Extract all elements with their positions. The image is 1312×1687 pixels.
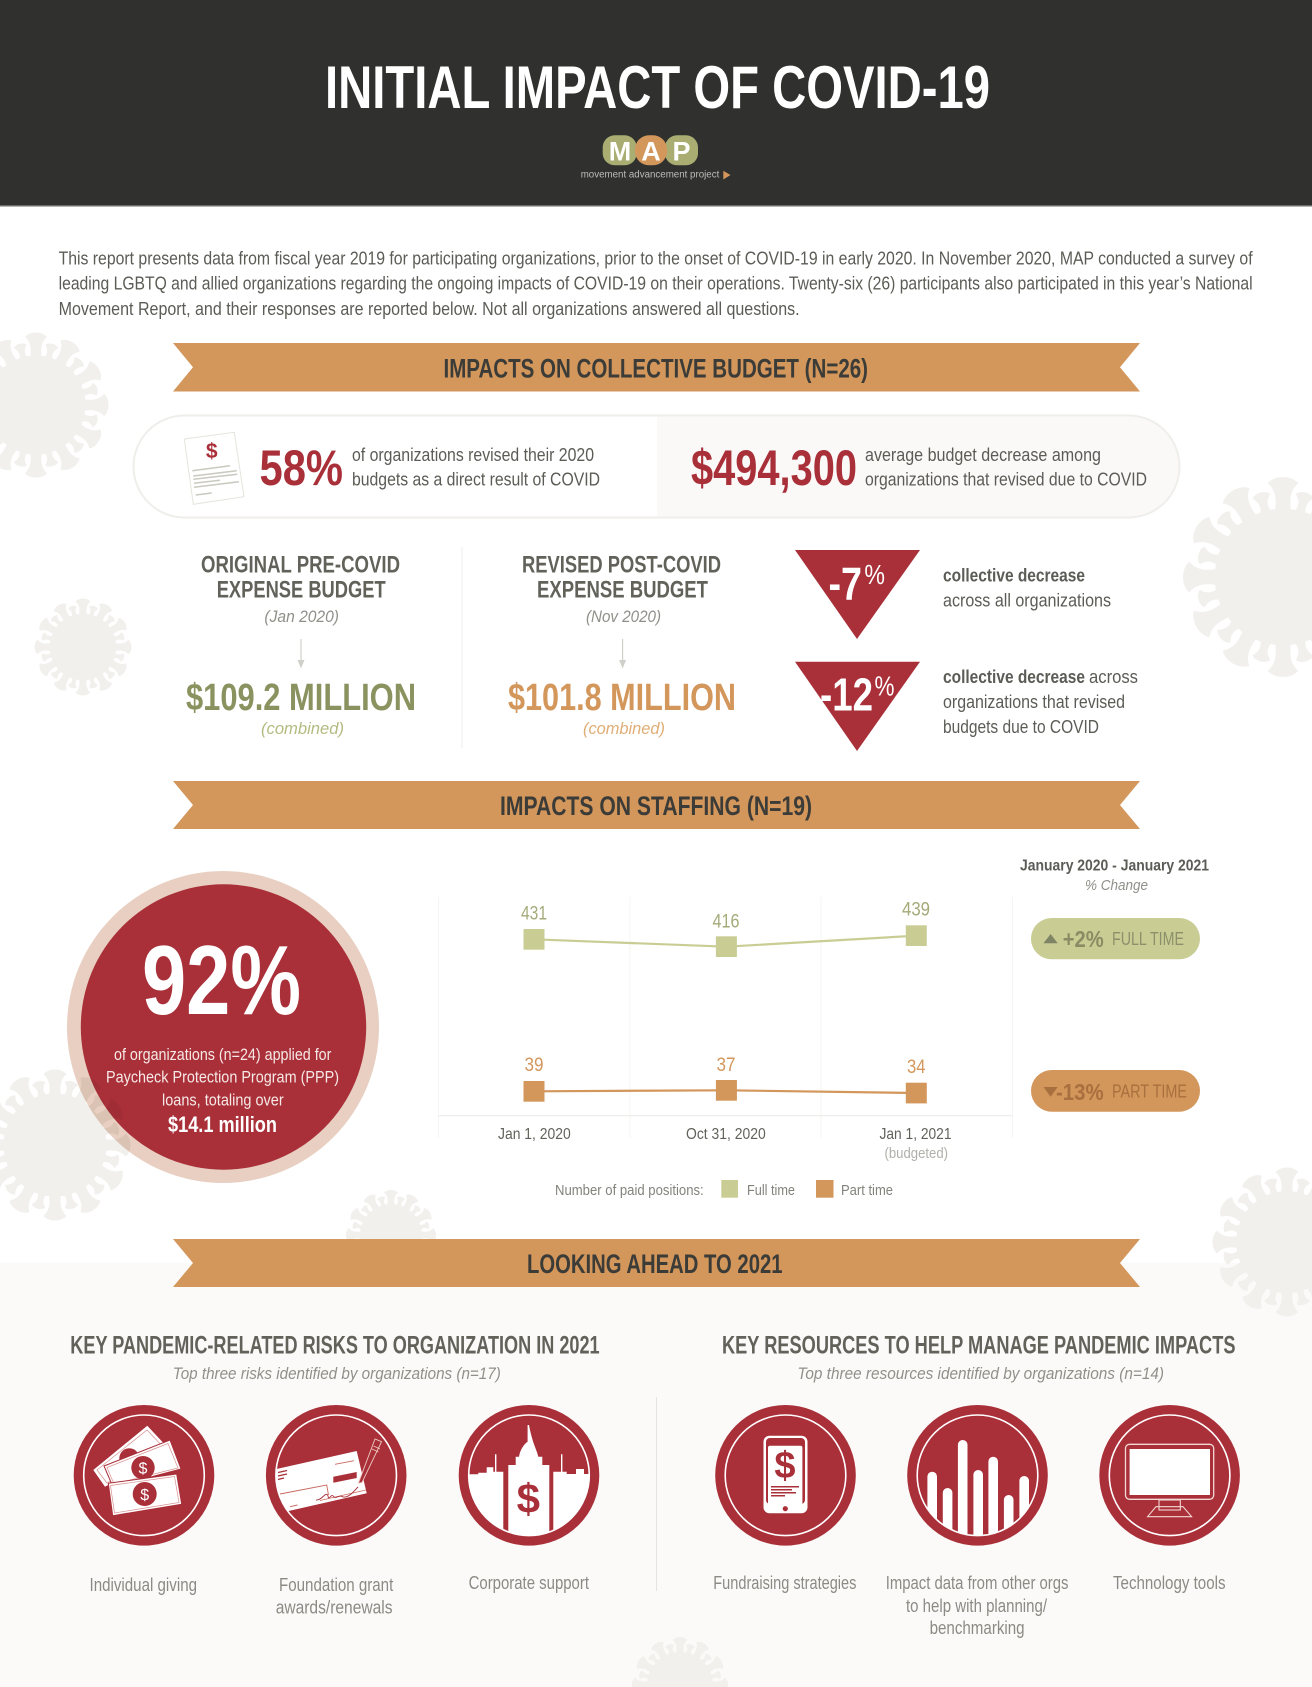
intro paragraph xyxy=(59,248,1253,319)
icon: fundraising phone: $ xyxy=(774,1445,796,1487)
panel: key resources: Top three resources identified by organizations (n=14) xyxy=(797,1364,1164,1383)
panel: 92% PPP circle: of organizations (n=24) applied for xyxy=(114,1046,332,1064)
series: full time: 416 xyxy=(712,912,740,933)
header band xyxy=(0,0,1312,206)
banner: impacts on staffing xyxy=(173,781,1140,829)
panel: revised post-covid budget: $101.8 MILLION xyxy=(508,677,736,719)
arrow: revised budget xyxy=(619,639,626,668)
panel: 92% PPP circle: $14.1 million xyxy=(168,1112,277,1137)
badge: part time change: -13% xyxy=(1056,1079,1104,1105)
x axis labels: Jan 1, 2020 xyxy=(498,1126,571,1143)
heading: percent change xyxy=(1020,858,1209,894)
virus decoration: lower right xyxy=(1211,1166,1312,1318)
panel: original pre-covid budget: EXPENSE BUDGET xyxy=(217,577,386,604)
panel: 92% PPP circle: Paycheck Protection Program (PPP) xyxy=(106,1068,339,1086)
panel: original pre-covid budget: (combined) xyxy=(261,719,344,738)
text: 58% description: of organizations revised their 2020 xyxy=(352,445,594,465)
series: full time: 439 xyxy=(902,899,930,920)
heading: percent change: January 2020 - January 2021 xyxy=(1020,858,1209,875)
callout: -7% decrease: across all organizations xyxy=(943,591,1111,611)
icon: budget document xyxy=(184,432,244,504)
MAP logo xyxy=(581,135,730,181)
icon: individual giving money: $ xyxy=(139,1460,148,1478)
icon: impact data bars xyxy=(907,1405,1048,1546)
virus decoration: lower left over circle xyxy=(0,1068,132,1222)
label: impact data: to help with planning/ xyxy=(906,1596,1047,1616)
icon: individual giving money: $ xyxy=(140,1487,149,1504)
series: part time: 34 xyxy=(907,1057,926,1078)
badge: part time change: PART TIME xyxy=(1112,1082,1187,1102)
text: average decrease description xyxy=(865,445,1147,490)
MAP logo: movement advancement project xyxy=(581,170,720,181)
label: foundation grant: awards/renewals xyxy=(276,1598,392,1618)
chart legend: Part time xyxy=(841,1182,893,1199)
banner: looking ahead to 2021: LOOKING AHEAD TO 2021 xyxy=(527,1249,782,1279)
panel: key risks xyxy=(70,1331,600,1618)
icon: corporate support city xyxy=(459,1405,599,1560)
panel: looking ahead background xyxy=(0,1263,1312,1687)
chart legend: Number of paid positions: xyxy=(555,1182,704,1199)
x axis labels: (budgeted) xyxy=(884,1145,948,1162)
x axis labels: Jan 1, 2021 xyxy=(880,1126,952,1143)
callout: -12% decrease: % xyxy=(874,671,894,702)
series: part time xyxy=(524,1055,927,1103)
virus decoration: center above banner xyxy=(345,1189,437,1281)
panel: original pre-covid budget: ORIGINAL PRE-COVID xyxy=(201,552,400,579)
icon: foundation grant check xyxy=(266,1405,407,1546)
callout: -12% decrease: organizations that revised xyxy=(943,692,1125,712)
callout: -12% decrease: across xyxy=(1089,667,1138,687)
panel: original pre-covid budget: $109.2 MILLION xyxy=(186,677,416,719)
badge: part time change xyxy=(1031,1070,1200,1112)
series: part time: 39 xyxy=(524,1055,544,1076)
series: full time: 431 xyxy=(521,903,547,924)
label: corporate support: Corporate support xyxy=(469,1573,589,1593)
text: average decrease description: average budget decrease among xyxy=(865,445,1101,465)
text: 58% description xyxy=(352,445,600,490)
panel: key risks: Top three risks identified by organizations (n=17) xyxy=(173,1364,501,1383)
panel: key resources xyxy=(713,1331,1240,1638)
chart legend: Full time xyxy=(747,1182,795,1199)
stat: $494,300: $494,300 xyxy=(691,440,857,496)
badge: full time change: +2% xyxy=(1063,926,1104,952)
line chart: paid positions xyxy=(438,897,1012,1199)
intro paragraph: Movement Report, and their responses are reported below. Not all organizations answered all questions. xyxy=(59,299,800,319)
virus decoration: small left xyxy=(33,597,133,697)
panel: original pre-covid budget xyxy=(186,552,416,738)
label: technology tools: Technology tools xyxy=(1113,1573,1226,1593)
stat: 58%: 58% xyxy=(260,440,343,496)
label: impact data xyxy=(886,1573,1068,1638)
arrow: original budget xyxy=(298,639,304,668)
panel: 92% PPP circle xyxy=(67,871,379,1183)
panel: revised post-covid budget: (Nov 2020) xyxy=(586,607,661,626)
label: foundation grant xyxy=(276,1575,393,1618)
label: impact data: benchmarking xyxy=(930,1618,1025,1638)
chart legend xyxy=(555,1180,893,1199)
callout: -7% decrease: collective decrease xyxy=(943,566,1085,586)
callout: -7% decrease: -7 xyxy=(828,557,862,609)
panel: revised post-covid budget xyxy=(508,552,736,738)
panel: revised post-covid budget: REVISED POST-COVID xyxy=(522,552,721,579)
label: foundation grant: Foundation grant xyxy=(279,1575,393,1595)
panel: 92% PPP circle: loans, totaling over xyxy=(162,1092,284,1110)
virus decoration: upper left xyxy=(0,331,110,479)
callout: -7% decrease xyxy=(795,550,1111,639)
icon: individual giving money xyxy=(74,1405,214,1546)
label: fundraising strategies: Fundraising strategies xyxy=(713,1573,856,1593)
icon: fundraising phone xyxy=(715,1405,856,1546)
label: impact data: Impact data from other orgs xyxy=(886,1573,1068,1593)
callout: -12% decrease: -12 xyxy=(820,669,873,721)
callout: -12% decrease: collective decrease xyxy=(943,667,1085,687)
panel: key risks: KEY PANDEMIC-RELATED RISKS TO ORGANIZATION IN 2021 xyxy=(70,1331,600,1359)
series: full time xyxy=(521,899,930,957)
banner: impacts on collective budget: IMPACTS ON COLLECTIVE BUDGET (N=26) xyxy=(444,353,868,383)
panel: revised post-covid budget: (combined) xyxy=(583,719,665,738)
x axis labels xyxy=(498,1126,952,1162)
text: 58% description: budgets as a direct result of COVID xyxy=(352,470,600,490)
banner: impacts on collective budget xyxy=(173,343,1140,392)
panel: 92% PPP circle: 92% xyxy=(142,925,301,1035)
icon: budget document: $ xyxy=(206,440,218,463)
MAP logo: P xyxy=(672,136,691,166)
callout: -12% decrease xyxy=(795,662,1138,751)
callout: -12% decrease: budgets due to COVID xyxy=(943,717,1099,737)
icon: technology monitor xyxy=(1099,1405,1240,1546)
label: individual giving: Individual giving xyxy=(90,1575,197,1595)
MAP logo: A xyxy=(641,136,661,166)
banner: looking ahead to 2021 xyxy=(173,1239,1140,1287)
badge: full time change xyxy=(1031,918,1200,959)
title: INITIAL IMPACT OF COVID-19 xyxy=(325,54,990,121)
panel: budget stats pill xyxy=(134,416,1180,518)
series: part time: 37 xyxy=(716,1055,736,1076)
heading: percent change: % Change xyxy=(1085,877,1148,894)
x axis labels: Oct 31, 2020 xyxy=(686,1126,766,1143)
callout: -7% decrease: % xyxy=(864,559,885,590)
icon: corporate support city: $ xyxy=(517,1475,540,1522)
badge: full time change: FULL TIME xyxy=(1112,929,1184,949)
virus decoration: bottom center xyxy=(631,1636,729,1687)
text: average decrease description: organizations that revised due to COVID xyxy=(865,470,1147,490)
banner: impacts on staffing: IMPACTS ON STAFFING (N=19) xyxy=(500,791,812,821)
panel: revised post-covid budget: EXPENSE BUDGET xyxy=(537,577,708,604)
panel: original pre-covid budget: (Jan 2020) xyxy=(264,607,339,626)
MAP logo: M xyxy=(609,136,631,166)
virus decoration: upper right xyxy=(1181,475,1312,679)
